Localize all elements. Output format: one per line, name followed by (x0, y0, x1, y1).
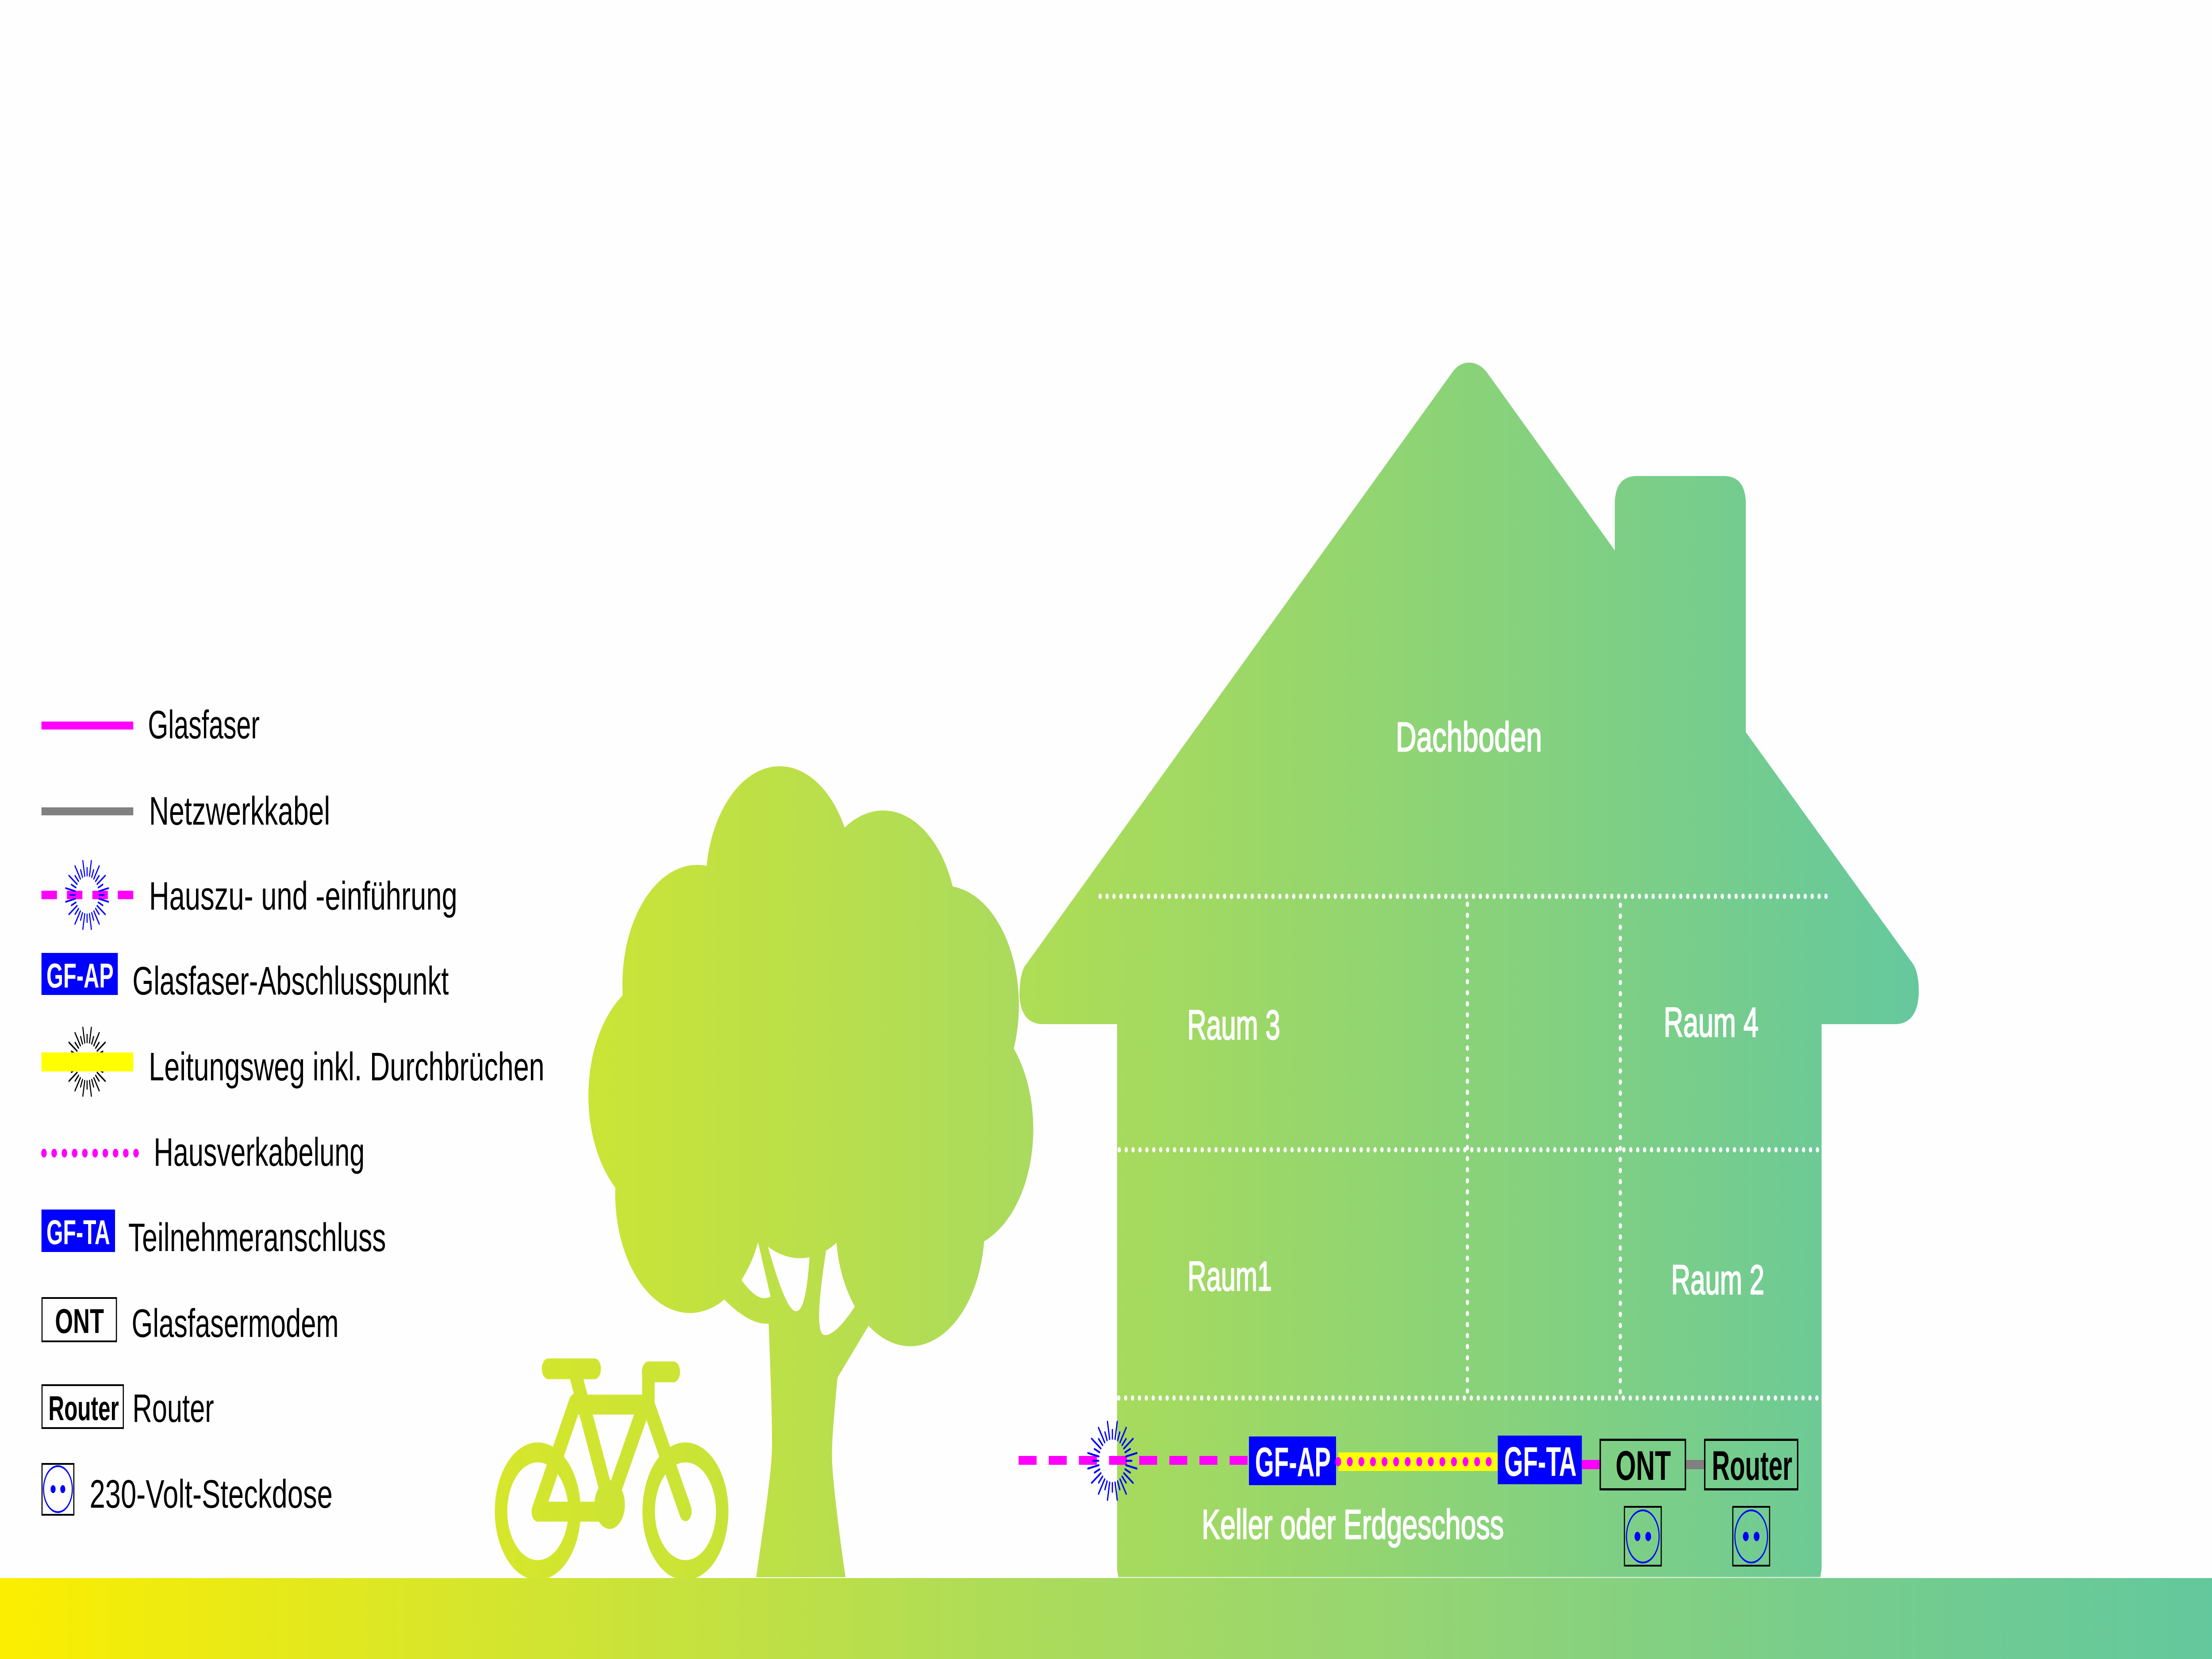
label: Raum 2: Raum 2 (1671, 1256, 1764, 1303)
legend text: Glasfaser: Glasfaser (148, 702, 260, 747)
legend: yellow route bar (42, 1052, 133, 1071)
legend text: Teilnehmeranschluss: Teilnehmeranschluss (128, 1215, 386, 1260)
legend text: Leitungsweg inkl. Durchbrüchen: Leitungsweg inkl. Durchbrüchen (149, 1044, 545, 1089)
legend text: Glasfaser-Abschlusspunkt: Glasfaser-Abschlusspunkt (132, 958, 449, 1003)
legend: dashed entry line (42, 891, 133, 899)
legend: ONT box (42, 1298, 116, 1341)
house connection line: dashed fibre (1018, 1456, 1248, 1465)
legend text: Glasfasermodem: Glasfasermodem (132, 1301, 339, 1345)
legend text: Hausverkabelung: Hausverkabelung (154, 1129, 365, 1174)
Router box in house: Router (1712, 1442, 1792, 1489)
house silhouette (1019, 363, 1919, 1578)
ONT box in house (1600, 1440, 1686, 1489)
socket under router (1733, 1507, 1770, 1566)
legend (42, 702, 545, 1516)
icon: house entry burst (1088, 1422, 1137, 1500)
fibre link to ONT (1582, 1460, 1600, 1469)
legend: GF-TA box: GF-TA (46, 1213, 110, 1252)
legend: socket (42, 1464, 74, 1515)
legend: Glasfaser line (42, 722, 133, 730)
legend icon: black burst (66, 1028, 108, 1096)
network cable to router (1686, 1460, 1704, 1469)
legend icon: blue burst (66, 861, 108, 929)
legend text: Router: Router (132, 1386, 214, 1430)
label: Raum 3: Raum 3 (1187, 1002, 1280, 1048)
house floor dividers (1100, 896, 1833, 1398)
cable route with dotted house wiring (1338, 1452, 1498, 1471)
GF-AP box in house: GF-AP (1255, 1439, 1331, 1485)
label: Keller oder Erdgeschoss: Keller oder Erdgeschoss (1202, 1501, 1504, 1548)
legend: dotted wiring (44, 1148, 137, 1157)
label: Dachboden: Dachboden (1396, 714, 1542, 760)
legend text: Hauszu- und -einführung: Hauszu- und -einführung (149, 873, 457, 918)
ground (0, 1578, 2212, 1659)
GF-TA box in house: GF-TA (1504, 1438, 1577, 1485)
tree (588, 766, 1033, 1577)
legend text: Netzwerkkabel: Netzwerkkabel (149, 788, 330, 833)
label: Raum1: Raum1 (1187, 1253, 1272, 1299)
legend text: 230-Volt-Steckdose: 230-Volt-Steckdose (89, 1471, 333, 1516)
label: Raum 4: Raum 4 (1664, 999, 1759, 1045)
ONT box in house: ONT (1616, 1442, 1671, 1489)
socket under ONT (1624, 1507, 1661, 1566)
legend: GF-AP box: GF-AP (46, 956, 114, 995)
legend: Router box: Router (48, 1389, 119, 1428)
bicycle (501, 1369, 722, 1570)
legend: ONT box: ONT (55, 1302, 104, 1340)
legend: Netzwerkkabel line (42, 807, 133, 815)
